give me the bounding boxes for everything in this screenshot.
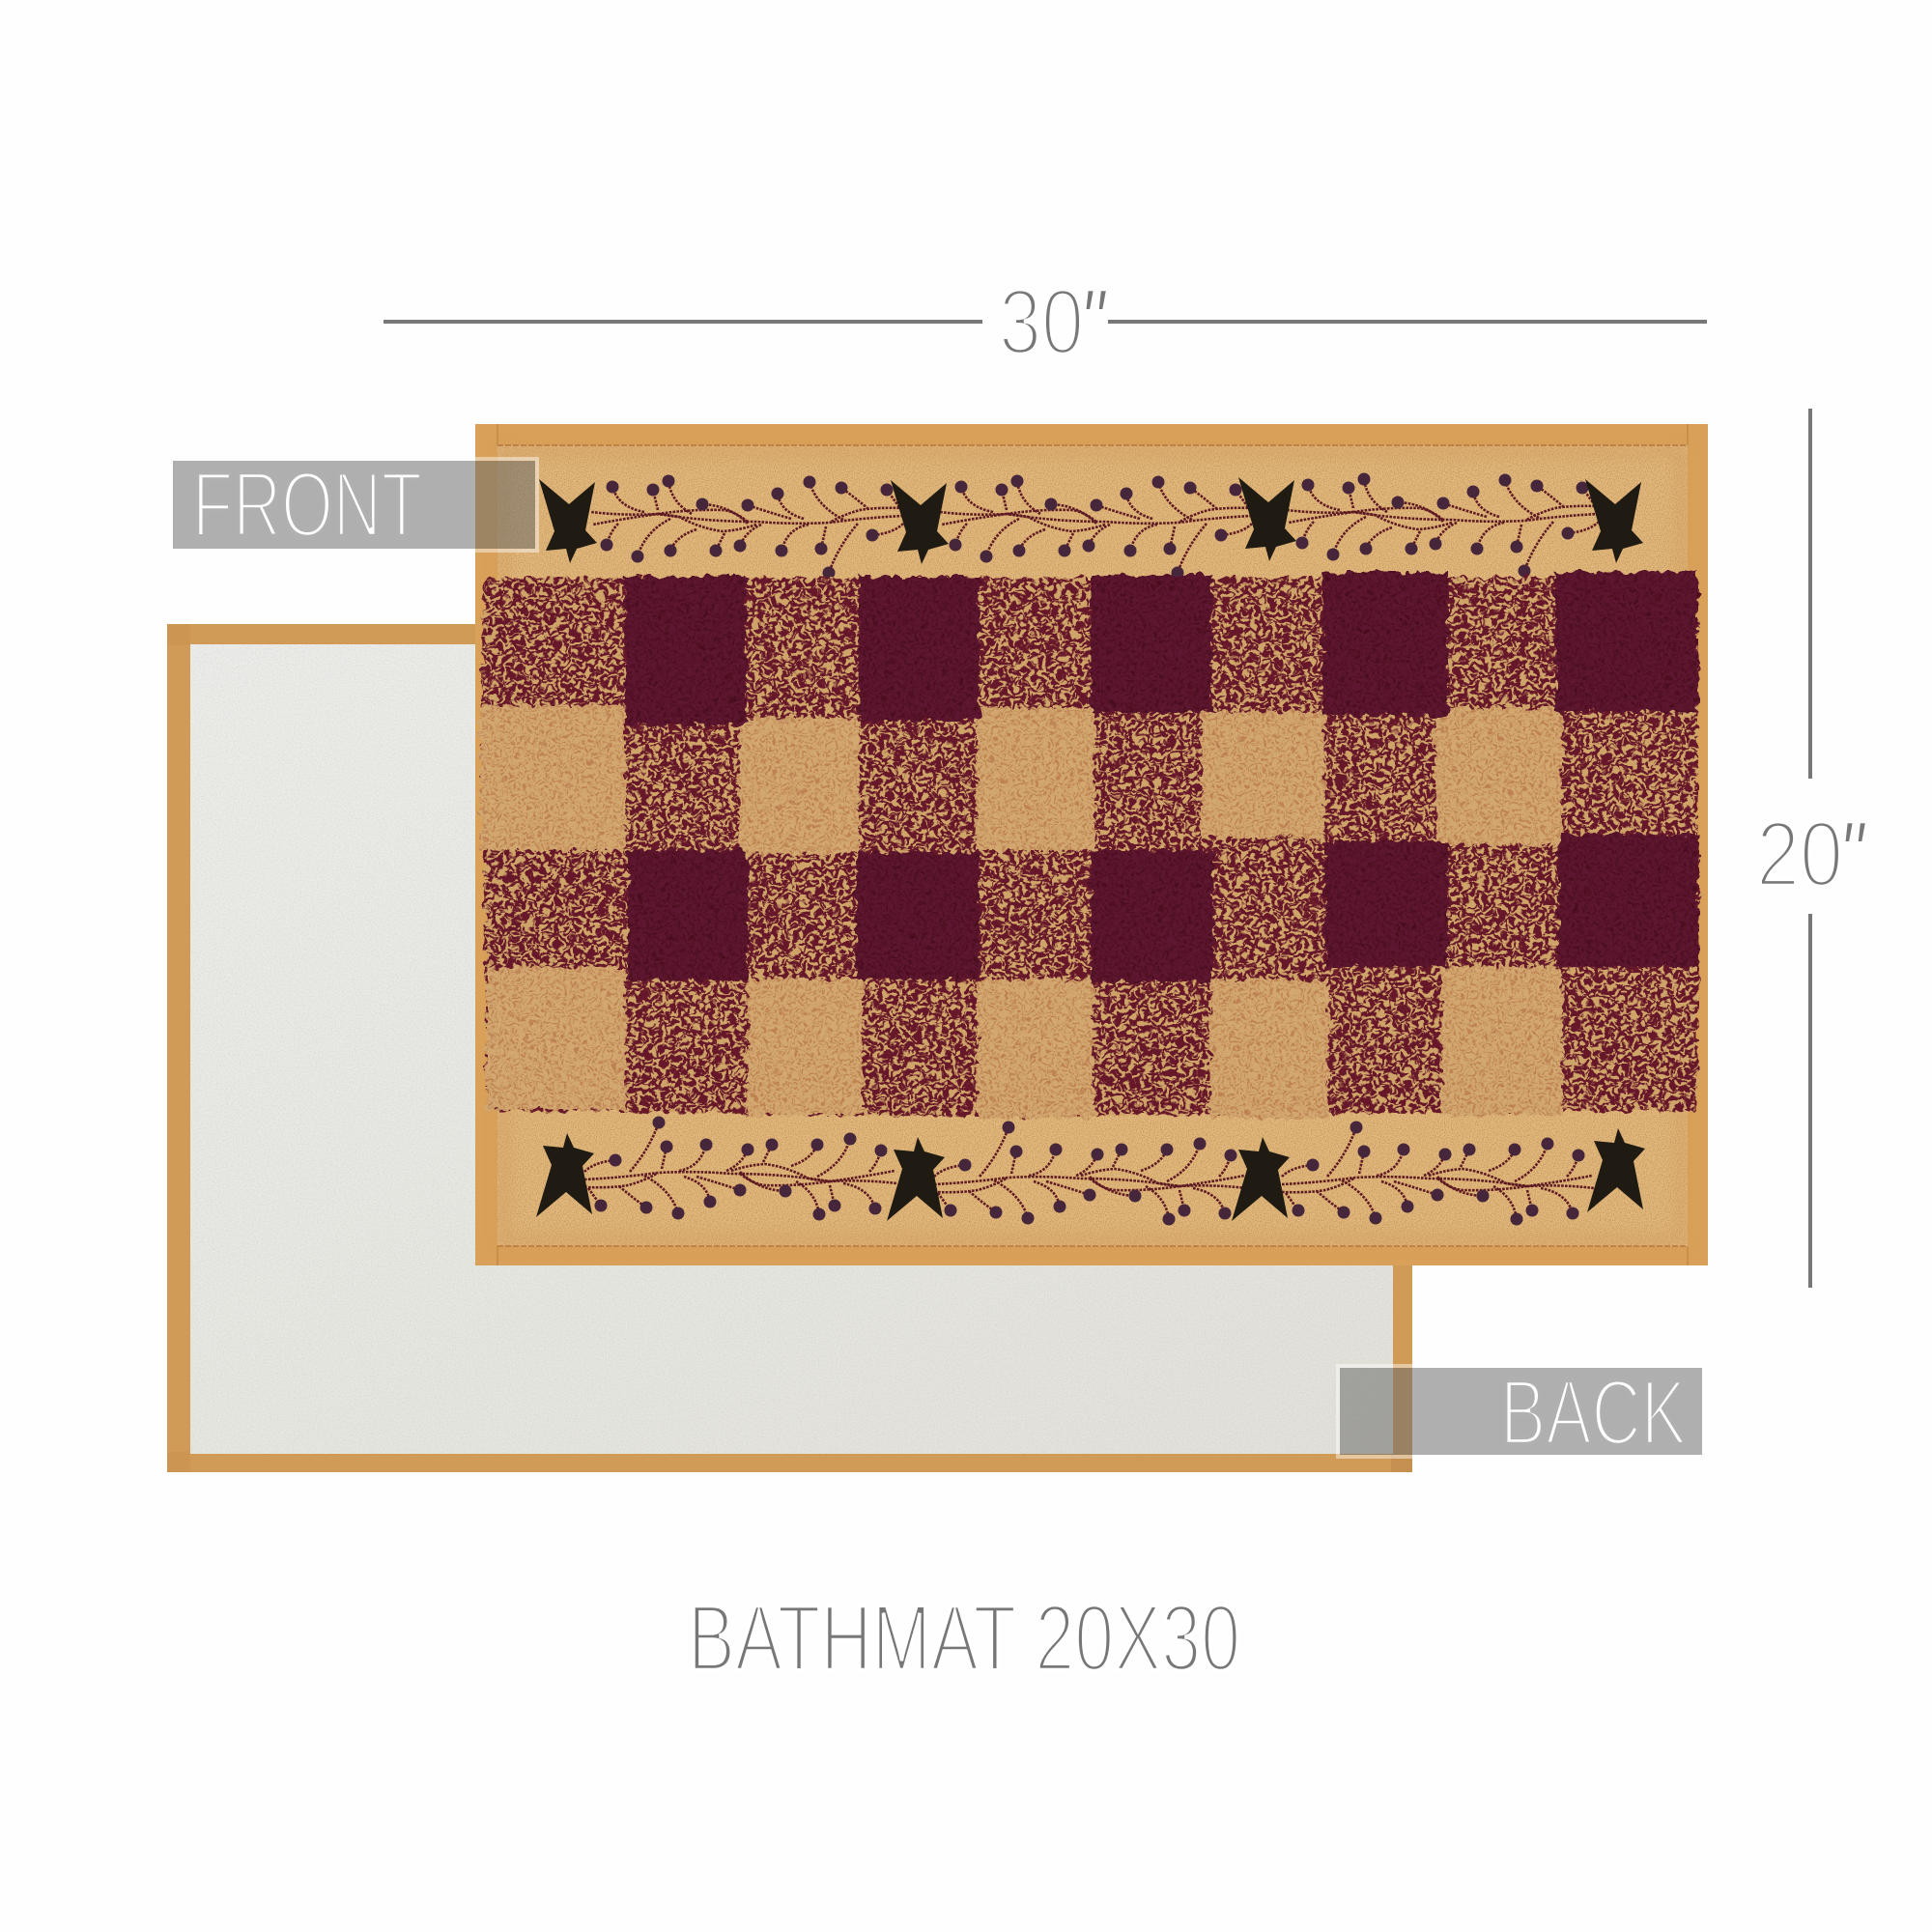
dimension: height 20 inches — [1756, 409, 1866, 1288]
dimension: height 20 inches: 20 — [1756, 803, 1843, 906]
bottom stars and vines — [536, 1117, 1645, 1225]
dimension: width 30 inches: 30 — [999, 270, 1084, 374]
dimension: width 30 inches — [384, 270, 1707, 374]
front binding — [475, 424, 1708, 1265]
label: FRONT: FRONT — [192, 453, 422, 556]
title: BATHMAT 20X30 — [688, 1585, 1240, 1690]
woven fabric — [497, 445, 1688, 1246]
buffalo check pile — [480, 572, 1698, 1119]
top stars and vines — [539, 473, 1643, 580]
dimension: height 20 inches: " — [1838, 803, 1866, 906]
back of bathmat — [167, 624, 1412, 1472]
front of bathmat — [475, 424, 1708, 1265]
label: BACK — [1338, 1361, 1704, 1464]
dimension: width 30 inches: " — [1079, 270, 1107, 374]
label: BACK: BACK — [1500, 1361, 1687, 1464]
